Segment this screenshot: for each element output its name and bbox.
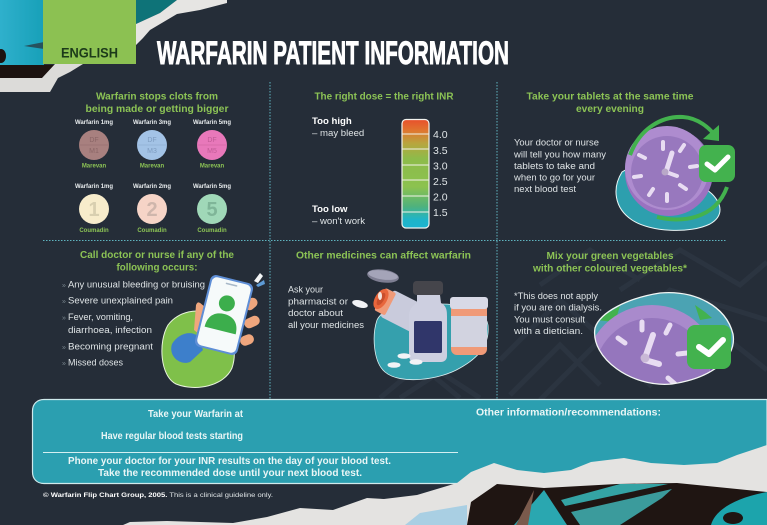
language tab [43,0,136,64]
tablet: Marevan 3mg: Marevan [140,164,165,170]
icon: check badge [699,145,735,182]
text: too high: – may bleed [312,128,364,139]
text: too low: Too low [312,204,348,215]
tablet: Coumadin 5mg: Coumadin [197,228,227,234]
heading: mix vegetables: with other coloured vegetables* [532,262,688,274]
illustration: clock [616,117,735,230]
text: doctor or nurse: Your doctor or nurse [514,138,599,148]
heading: warfarin stops clots [86,90,228,115]
text: phone your doctor: Phone your doctor for your INR results on the day of your blood test. [68,456,391,467]
copyright note: © Warfarin Flip Chart Group, 2005. This is a clinical guideline only. [43,491,273,499]
tablet: Marevan 5mg: DF [207,137,217,144]
heading: mix vegetables: Mix your green vegetables [546,250,674,262]
panel: call doctor [62,249,265,387]
panel: other medicines [288,250,488,380]
text: dialysis note: You must consult [514,314,585,326]
text: take your warfarin at: Take your Warfarin at [148,409,244,420]
text: doctor or nurse [513,138,606,195]
tablet: Marevan 1mg: Warfarin 1mg [75,120,113,126]
bullet list: » [62,344,66,352]
text: doctor or nurse: will tell you how many [513,150,606,160]
text: dialysis note: with a dietician. [513,326,583,337]
bullet list: Any unusual bleeding or bruising [68,280,205,290]
grid dividers [43,82,727,399]
tablet: Marevan 1mg: M1 [89,148,99,155]
tablet: Marevan 5mg: Marevan [200,164,225,170]
bullet list: Missed doses [68,358,123,368]
heading: take tablets [526,90,694,115]
bullet list: » [62,298,66,306]
text: dialysis note [513,291,602,337]
language tab: ENGLISH [61,46,118,60]
bullet list: » [62,360,66,368]
INR scale labels: 3.5 [433,145,448,157]
heading: call doctor [80,249,234,274]
text: too high: Too high [312,116,352,127]
heading: mix vegetables [532,250,688,274]
illustration: hand holding phone [162,273,265,387]
bullet list: Becoming pregnant [68,342,153,352]
text: phone your doctor: Take the recommended dose until your next blood test. [98,468,362,479]
bullet list: » [62,315,66,322]
heading: warfarin stops clots: Warfarin stops clots from [96,90,218,102]
bullet list: diarrhoea, infection [68,325,152,336]
text: doctor or nurse: next blood test [514,184,576,195]
bullet list: » [62,282,66,290]
heading: call doctor: following occurs: [116,262,198,274]
INR scale labels: 3.0 [433,160,448,172]
text: dialysis note: *This does not apply [514,291,598,302]
tablet: Marevan 3mg [133,120,171,170]
text: phone your doctor [68,456,391,479]
illustration: clock blob [594,292,734,385]
text: ask your pharmacist: all your medicines [288,320,364,331]
heading: take tablets: Take your tablets at the same time [526,90,694,102]
heading: right dose: The right dose = the right INR [314,90,454,102]
tablet: Coumadin 1mg: Coumadin [79,228,109,234]
tablet: Coumadin 2mg: Warfarin 2mg [133,184,171,190]
tablet: Coumadin 1mg: 1 [88,199,100,221]
text: doctor or nurse: tablets to take and [514,161,595,172]
heading: other medicines: Other medicines can affect warfarin [296,250,471,262]
title: WARFARIN PATIENT INFORMATION [157,35,509,71]
tablet: Marevan 1mg: Marevan [82,164,107,170]
tablet: Marevan 5mg: M5 [207,148,217,155]
text: too high [312,116,364,139]
text: ask your pharmacist [288,284,364,331]
text: too low: – won't work [312,216,365,227]
heading: warfarin stops clots: being made or getting bigger [86,103,228,115]
panel: vegetables [514,252,734,385]
bullet list [62,280,205,368]
tablet: Marevan 5mg: Warfarin 5mg [193,120,231,126]
bullet list: Severe unexplained pain [68,296,173,306]
tablet: Coumadin 5mg [193,184,231,234]
panel: dosing notes [32,400,767,484]
panel: warfarin tablets [75,90,231,234]
INR scale labels: 2.5 [433,176,448,188]
heading: take tablets: every evening [576,103,644,115]
arrow: lower arc [657,187,727,219]
tablet: Marevan 3mg: DF [147,137,157,144]
tablet: Marevan 3mg: Warfarin 3mg [133,120,171,126]
tablet: Coumadin 5mg: 5 [206,199,218,221]
tablet: Coumadin 2mg: 2 [146,199,158,221]
tablet: Coumadin 2mg: Coumadin [137,228,167,234]
text: other information: Other information/recommendations: [476,408,661,418]
tablet: Coumadin 5mg: Warfarin 5mg [193,184,231,190]
INR scale labels [433,129,448,219]
text: doctor or nurse: when to go for your [513,172,596,184]
INR scale labels: 4.0 [433,129,448,141]
illustration: medicine bottles [351,267,488,380]
panel: same time every evening [513,90,735,230]
INR colour bar [402,120,429,228]
arrow: top arc [630,117,716,155]
bullet list: Fever, vomiting, [68,312,133,323]
panel: INR scale [312,90,454,228]
tablet: Marevan 5mg [193,120,231,170]
text: dialysis note: if you are on dialysis. [514,302,602,314]
INR scale labels: 1.5 [433,207,448,219]
background pattern [380,250,767,400]
text: ask your pharmacist: doctor about [288,308,343,319]
icon: check badge [687,325,731,369]
text: too low [312,204,365,227]
text: ask your pharmacist: pharmacist or [288,296,349,308]
tablet: Coumadin 2mg [133,184,171,234]
text: regular blood tests: Have regular blood tests starting [101,431,243,442]
tablet: Marevan 1mg: DF [89,137,99,144]
tablet: Marevan 3mg: M3 [147,148,157,155]
torn image: bottom right [123,445,767,525]
tablet: Coumadin 1mg [75,184,113,234]
INR scale labels: 2.0 [433,192,448,204]
heading: call doctor: Call doctor or nurse if any of the [80,249,234,261]
torn corner image: top left [0,0,227,92]
text: ask your pharmacist: Ask your [288,284,324,296]
tablet: Marevan 1mg [75,120,113,170]
tablet: Coumadin 1mg: Warfarin 1mg [75,184,113,190]
